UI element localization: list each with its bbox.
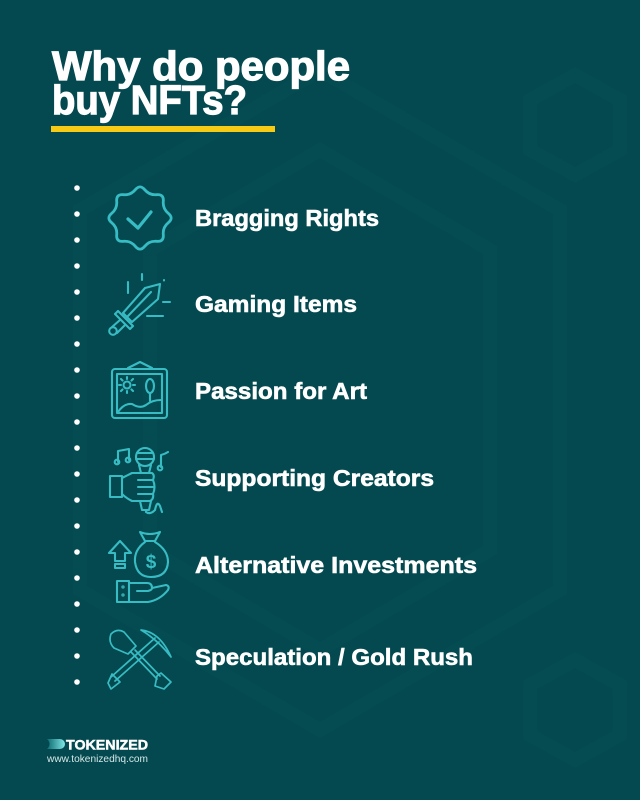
label: Supporting Creators: Supporting Creators [195,465,434,491]
logo [46,736,148,765]
icon: framed painting [112,362,167,418]
title: buy NFTs? [52,77,247,123]
icon: shovel and pickaxe [108,630,171,689]
icon: investment money bag [109,532,169,602]
dotted timeline [74,185,80,685]
title underline [51,126,275,132]
icon: investment money bag: $ [146,552,157,573]
icon: verified badge [109,187,171,249]
label: Alternative Investments: Alternative Investments [195,552,477,578]
title: Why do people [52,43,350,89]
logo wordmark: TOKENIZED [66,736,148,752]
label: Gaming Items: Gaming Items [195,291,357,317]
label: Bragging Rights: Bragging Rights [195,205,379,231]
logo mark [47,739,65,749]
website url: www.tokenizedhq.com [46,753,148,765]
label: Speculation / Gold Rush: Speculation / Gold Rush [195,644,473,670]
label: Passion for Art: Passion for Art [195,378,367,404]
icon: sword [109,274,170,335]
icon: hand holding microphone [110,448,168,513]
title [52,43,350,123]
